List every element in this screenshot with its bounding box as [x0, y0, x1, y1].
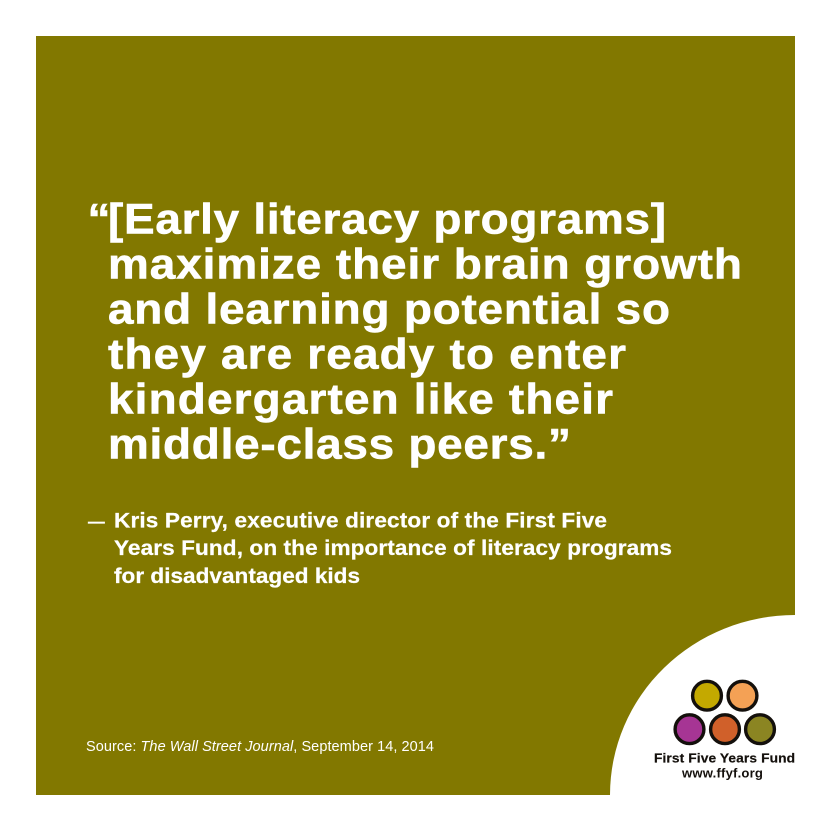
logo url: www.ffyf.org: [681, 766, 763, 781]
quote line 6: middle-class peers.”: [108, 421, 571, 468]
attribution line 3: for disadvantaged kids: [114, 563, 360, 588]
circle: yellow: [693, 681, 721, 710]
attribution dash: —: [88, 513, 105, 531]
opening quotation mark: “: [87, 196, 110, 243]
attribution line 1: Kris Perry, executive director of the First Five: [114, 508, 607, 532]
circle: orange: [711, 715, 739, 744]
quote line 1: [Early literacy programs]: [108, 196, 666, 243]
icon: five circles: [675, 681, 774, 744]
attribution: [88, 508, 672, 588]
logo name: First Five Years Fund: [654, 751, 795, 765]
logo: First Five Years Fund: [654, 681, 795, 781]
white quarter circle corner: [610, 615, 795, 795]
circle: purple: [675, 715, 704, 744]
quote text: [87, 196, 742, 468]
attribution line 2: Years Fund, on the importance of literacy programs: [114, 535, 672, 560]
quote line 2: maximize their brain growth: [108, 241, 742, 288]
circle: olive: [746, 715, 774, 744]
quote line 5: kindergarten like their: [108, 376, 613, 423]
quote line 3: and learning potential so: [108, 286, 670, 333]
circle: light orange: [728, 681, 757, 710]
source note: Source: The Wall Street Journal, September 14, 2014: [86, 739, 434, 755]
quote line 4: they are ready to enter: [108, 331, 626, 378]
